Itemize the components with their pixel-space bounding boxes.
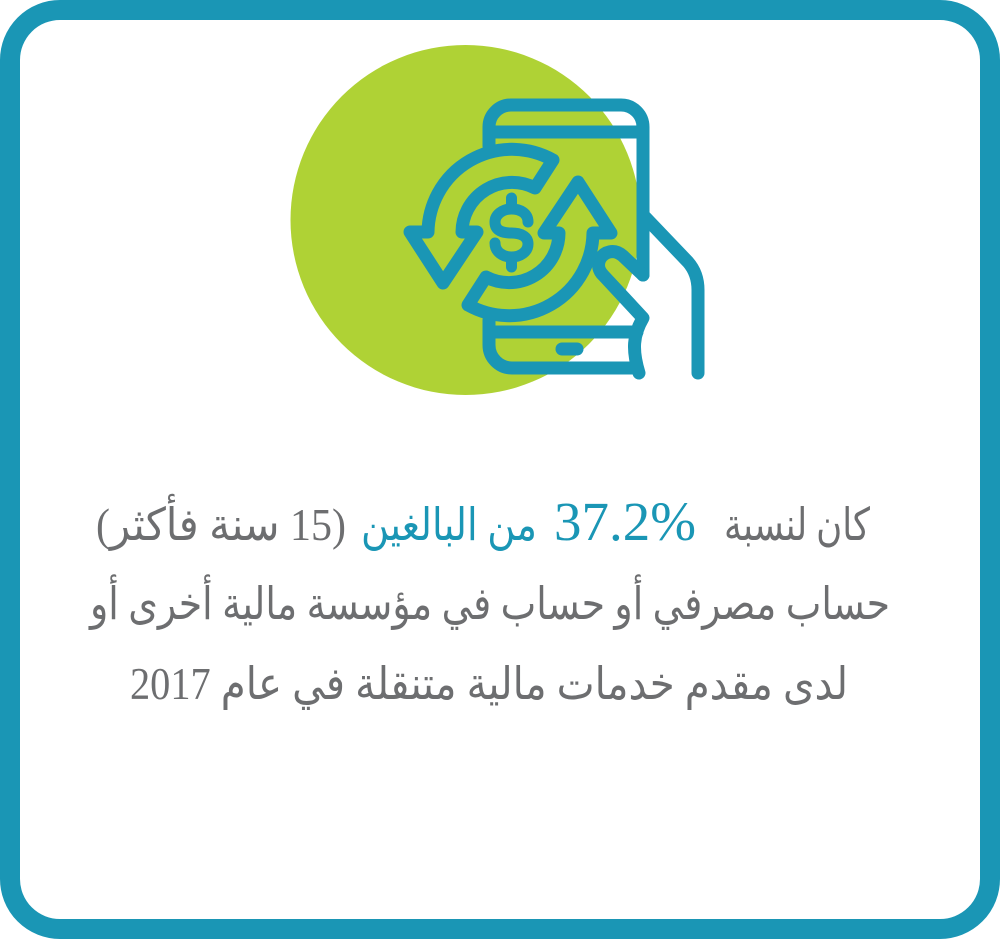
icon: curved arrow up xyxy=(468,182,611,316)
text line 1: (15 سنة فأكثر) xyxy=(96,493,346,551)
icon: hand and thumb xyxy=(599,217,698,373)
icon: curved arrow down xyxy=(410,149,553,283)
text line 3: لدى مقدم خدمات مالية متنقلة في عام 2017 xyxy=(130,659,848,710)
text line 1 xyxy=(96,491,870,552)
text line 1: 37.2% xyxy=(554,491,696,552)
text line 1: من البالغين xyxy=(361,500,537,551)
icon: green circle background xyxy=(290,45,640,395)
icon: phone body xyxy=(489,105,643,368)
icon: phone with money exchange arrows xyxy=(410,105,698,373)
icon: dollar sign xyxy=(495,198,528,267)
text block: main statement xyxy=(88,491,890,710)
text line 1: كان لنسبة xyxy=(724,500,870,550)
